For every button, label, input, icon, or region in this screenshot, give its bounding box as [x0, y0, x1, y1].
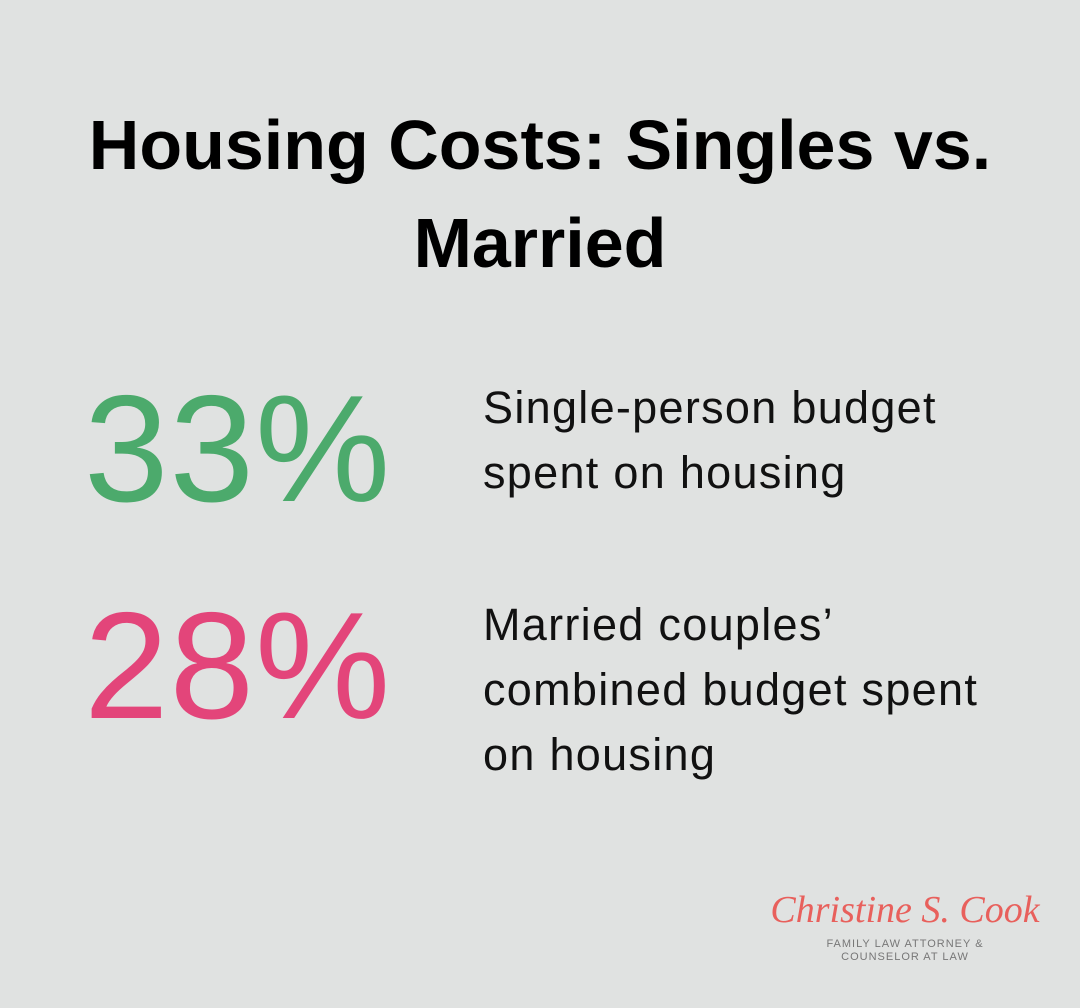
text: singles description: spent on housing [483, 447, 847, 498]
text: singles description: Single-person budget [483, 382, 937, 433]
text: married description: combined budget spent [483, 664, 978, 715]
stat: married 28%: 28% [84, 581, 391, 751]
title: Married [414, 204, 666, 282]
logo [770, 889, 1040, 963]
title [89, 106, 991, 282]
stat: singles 33%: 33% [84, 364, 391, 534]
text: married description [483, 599, 978, 780]
title: Housing Costs: Singles vs. [89, 106, 991, 184]
text: singles description [483, 382, 937, 498]
logo: FAMILY LAW ATTORNEY & [826, 938, 984, 950]
text: married description: on housing [483, 729, 716, 780]
logo: COUNSELOR AT LAW [841, 951, 969, 963]
logo: Christine S. Cook [770, 889, 1040, 931]
text: married description: Married couples’ [483, 599, 834, 650]
